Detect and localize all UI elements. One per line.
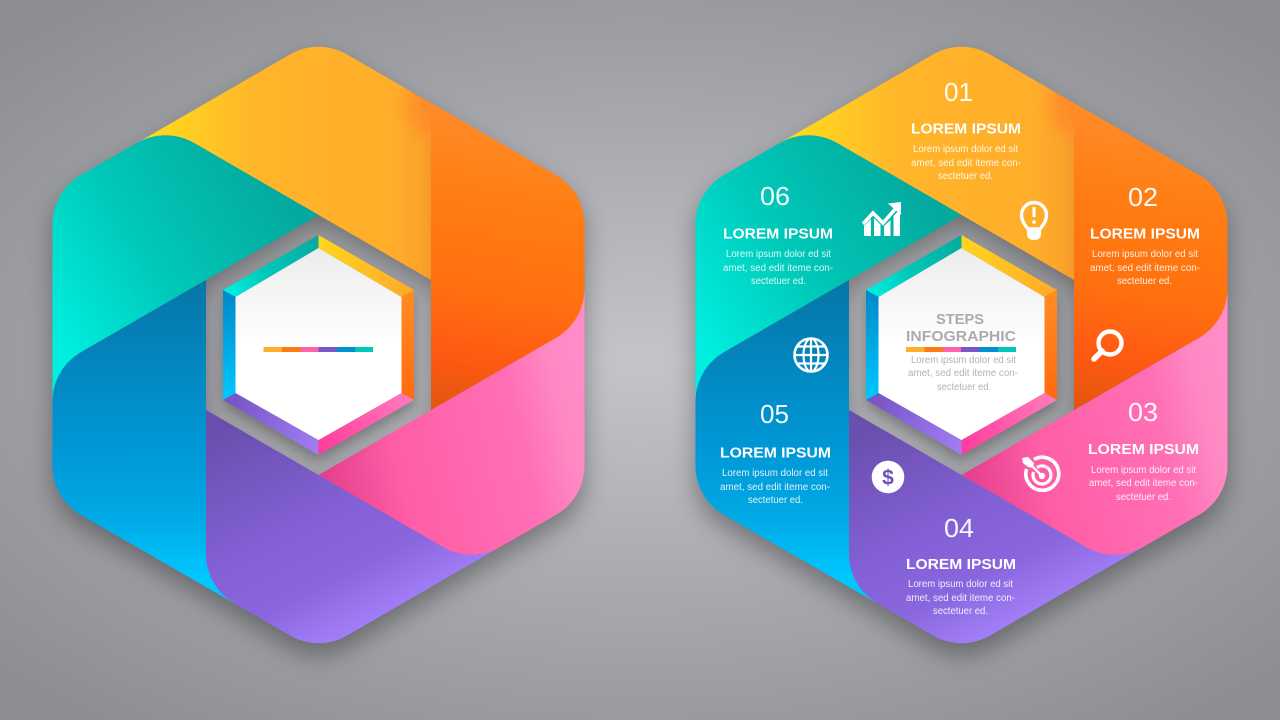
segment: purple xyxy=(206,410,500,643)
body 05: sectetuer ed. xyxy=(748,495,803,506)
heading 01: LOREM IPSUM xyxy=(911,122,1021,138)
step 02 xyxy=(1090,182,1200,359)
heading 02: LOREM IPSUM xyxy=(1090,226,1200,242)
body 05 xyxy=(720,468,830,506)
body 01: Lorem ipsum dolor ed sit xyxy=(913,144,1018,155)
body 06: amet, sed edit iteme con- xyxy=(723,263,833,274)
body 02: amet, sed edit iteme con- xyxy=(1090,263,1200,274)
icon: globe xyxy=(794,338,828,372)
body 01 xyxy=(911,144,1021,182)
centre body text: Lorem ipsum dolor ed sit xyxy=(911,355,1016,366)
step 01 xyxy=(911,77,1046,240)
centre body text: amet, sed edit iteme con- xyxy=(908,368,1018,379)
segment: orange right xyxy=(1045,86,1228,410)
heading 05: LOREM IPSUM xyxy=(720,446,831,462)
icon: lightbulb xyxy=(1022,202,1046,240)
body 06: Lorem ipsum dolor ed sit xyxy=(726,249,831,260)
centre body text: sectetuer ed. xyxy=(937,382,991,393)
step 05 xyxy=(720,338,831,506)
segment: teal xyxy=(52,135,318,250)
step 04 xyxy=(872,461,1016,617)
body 05: Lorem ipsum dolor ed sit xyxy=(722,468,828,479)
heading 03: LOREM IPSUM xyxy=(1088,442,1199,458)
body 01: amet, sed edit iteme con- xyxy=(911,158,1021,169)
segment: pink right xyxy=(962,288,1228,555)
body 02: sectetuer ed. xyxy=(1117,276,1172,287)
number 06: 06 xyxy=(760,181,790,211)
segment: yellow xyxy=(137,47,431,280)
icon: target xyxy=(1022,457,1059,490)
centre heading xyxy=(906,311,1016,345)
number 01: 01 xyxy=(944,77,973,107)
segment: purple right xyxy=(849,410,1143,643)
centre body text xyxy=(908,355,1018,393)
centre title block xyxy=(906,311,1018,393)
centre colour bar xyxy=(906,347,1016,352)
heading 04: LOREM IPSUM xyxy=(906,557,1016,573)
body 04: sectetuer ed. xyxy=(933,606,988,617)
body 02 xyxy=(1090,249,1200,287)
icon: growth chart xyxy=(863,202,901,236)
left hexagon infographic xyxy=(52,47,585,643)
yellow tip tint right xyxy=(780,47,1074,280)
body 03 xyxy=(1089,465,1198,503)
body 04 xyxy=(906,579,1015,617)
body 02: Lorem ipsum dolor ed sit xyxy=(1092,249,1198,260)
right hexagon infographic xyxy=(695,47,1228,643)
body 03: sectetuer ed. xyxy=(1116,492,1171,503)
body 03: amet, sed edit iteme con- xyxy=(1089,478,1198,489)
centre heading: STEPS xyxy=(936,311,984,328)
left colour bar xyxy=(264,347,373,352)
body 05: amet, sed edit iteme con- xyxy=(720,482,830,493)
number 04: 04 xyxy=(944,513,974,543)
body 06 xyxy=(723,249,833,287)
icon: dollar: $ xyxy=(882,466,894,490)
segment: orange xyxy=(402,86,585,410)
body 03: Lorem ipsum dolor ed sit xyxy=(1091,465,1196,476)
segment: blue xyxy=(52,280,235,604)
yellow tip tint xyxy=(137,47,431,280)
segment: teal right xyxy=(696,135,962,250)
heading 06: LOREM IPSUM xyxy=(723,226,833,242)
left centre bevelled hexagon xyxy=(223,235,414,455)
right hexagon segments xyxy=(695,47,1228,643)
step 06 xyxy=(723,181,901,287)
right centre bevelled hexagon xyxy=(866,235,1057,455)
centre heading: INFOGRAPHIC xyxy=(906,328,1016,345)
body 04: amet, sed edit iteme con- xyxy=(906,593,1015,604)
step 03 xyxy=(1022,397,1199,503)
number 02: 02 xyxy=(1128,182,1158,212)
body 01: sectetuer ed. xyxy=(938,171,993,182)
icon: dollar xyxy=(872,461,904,493)
icon: magnifier xyxy=(1094,332,1122,359)
number 05: 05 xyxy=(760,399,789,429)
body 04: Lorem ipsum dolor ed sit xyxy=(908,579,1013,590)
number 03: 03 xyxy=(1128,397,1158,427)
segment: yellow right xyxy=(780,47,1074,280)
body 06: sectetuer ed. xyxy=(751,276,806,287)
left hexagon segments xyxy=(52,47,585,643)
segment: blue right xyxy=(695,280,878,604)
segment: pink xyxy=(318,288,585,555)
